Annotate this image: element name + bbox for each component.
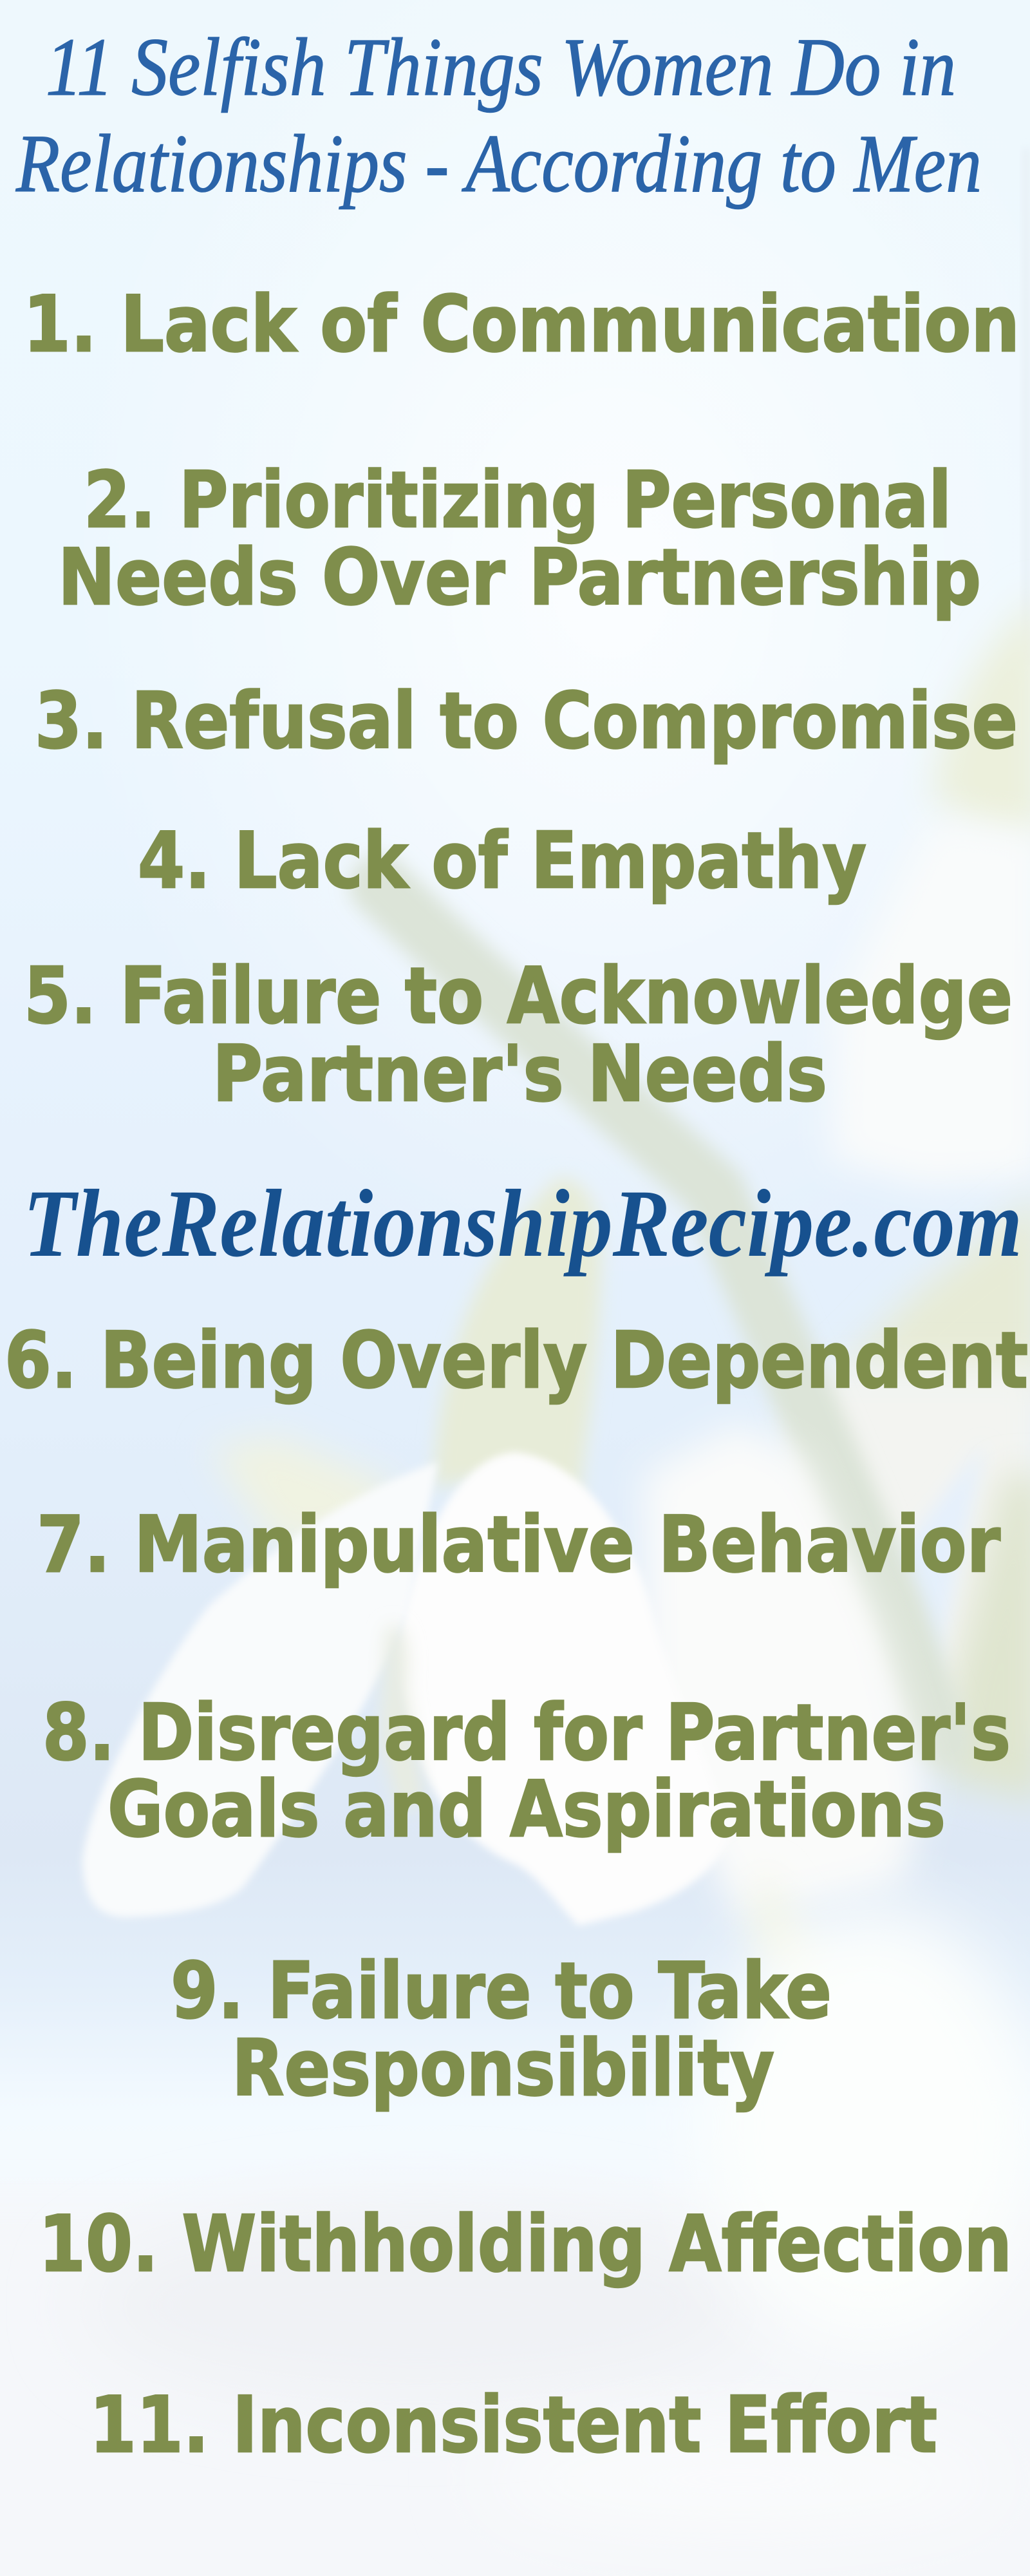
item 9: 9. Failure to Take (171, 1947, 832, 2036)
item 9 (171, 1947, 832, 2114)
title (15, 21, 982, 209)
item 2 (58, 456, 981, 623)
item 4: 4. Lack of Empathy (138, 817, 866, 906)
item 5: Partner's Needs (212, 1030, 827, 1119)
item 9: Responsibility (232, 2024, 774, 2114)
item 5 (24, 952, 1013, 1119)
item 8 (42, 1689, 1011, 1855)
